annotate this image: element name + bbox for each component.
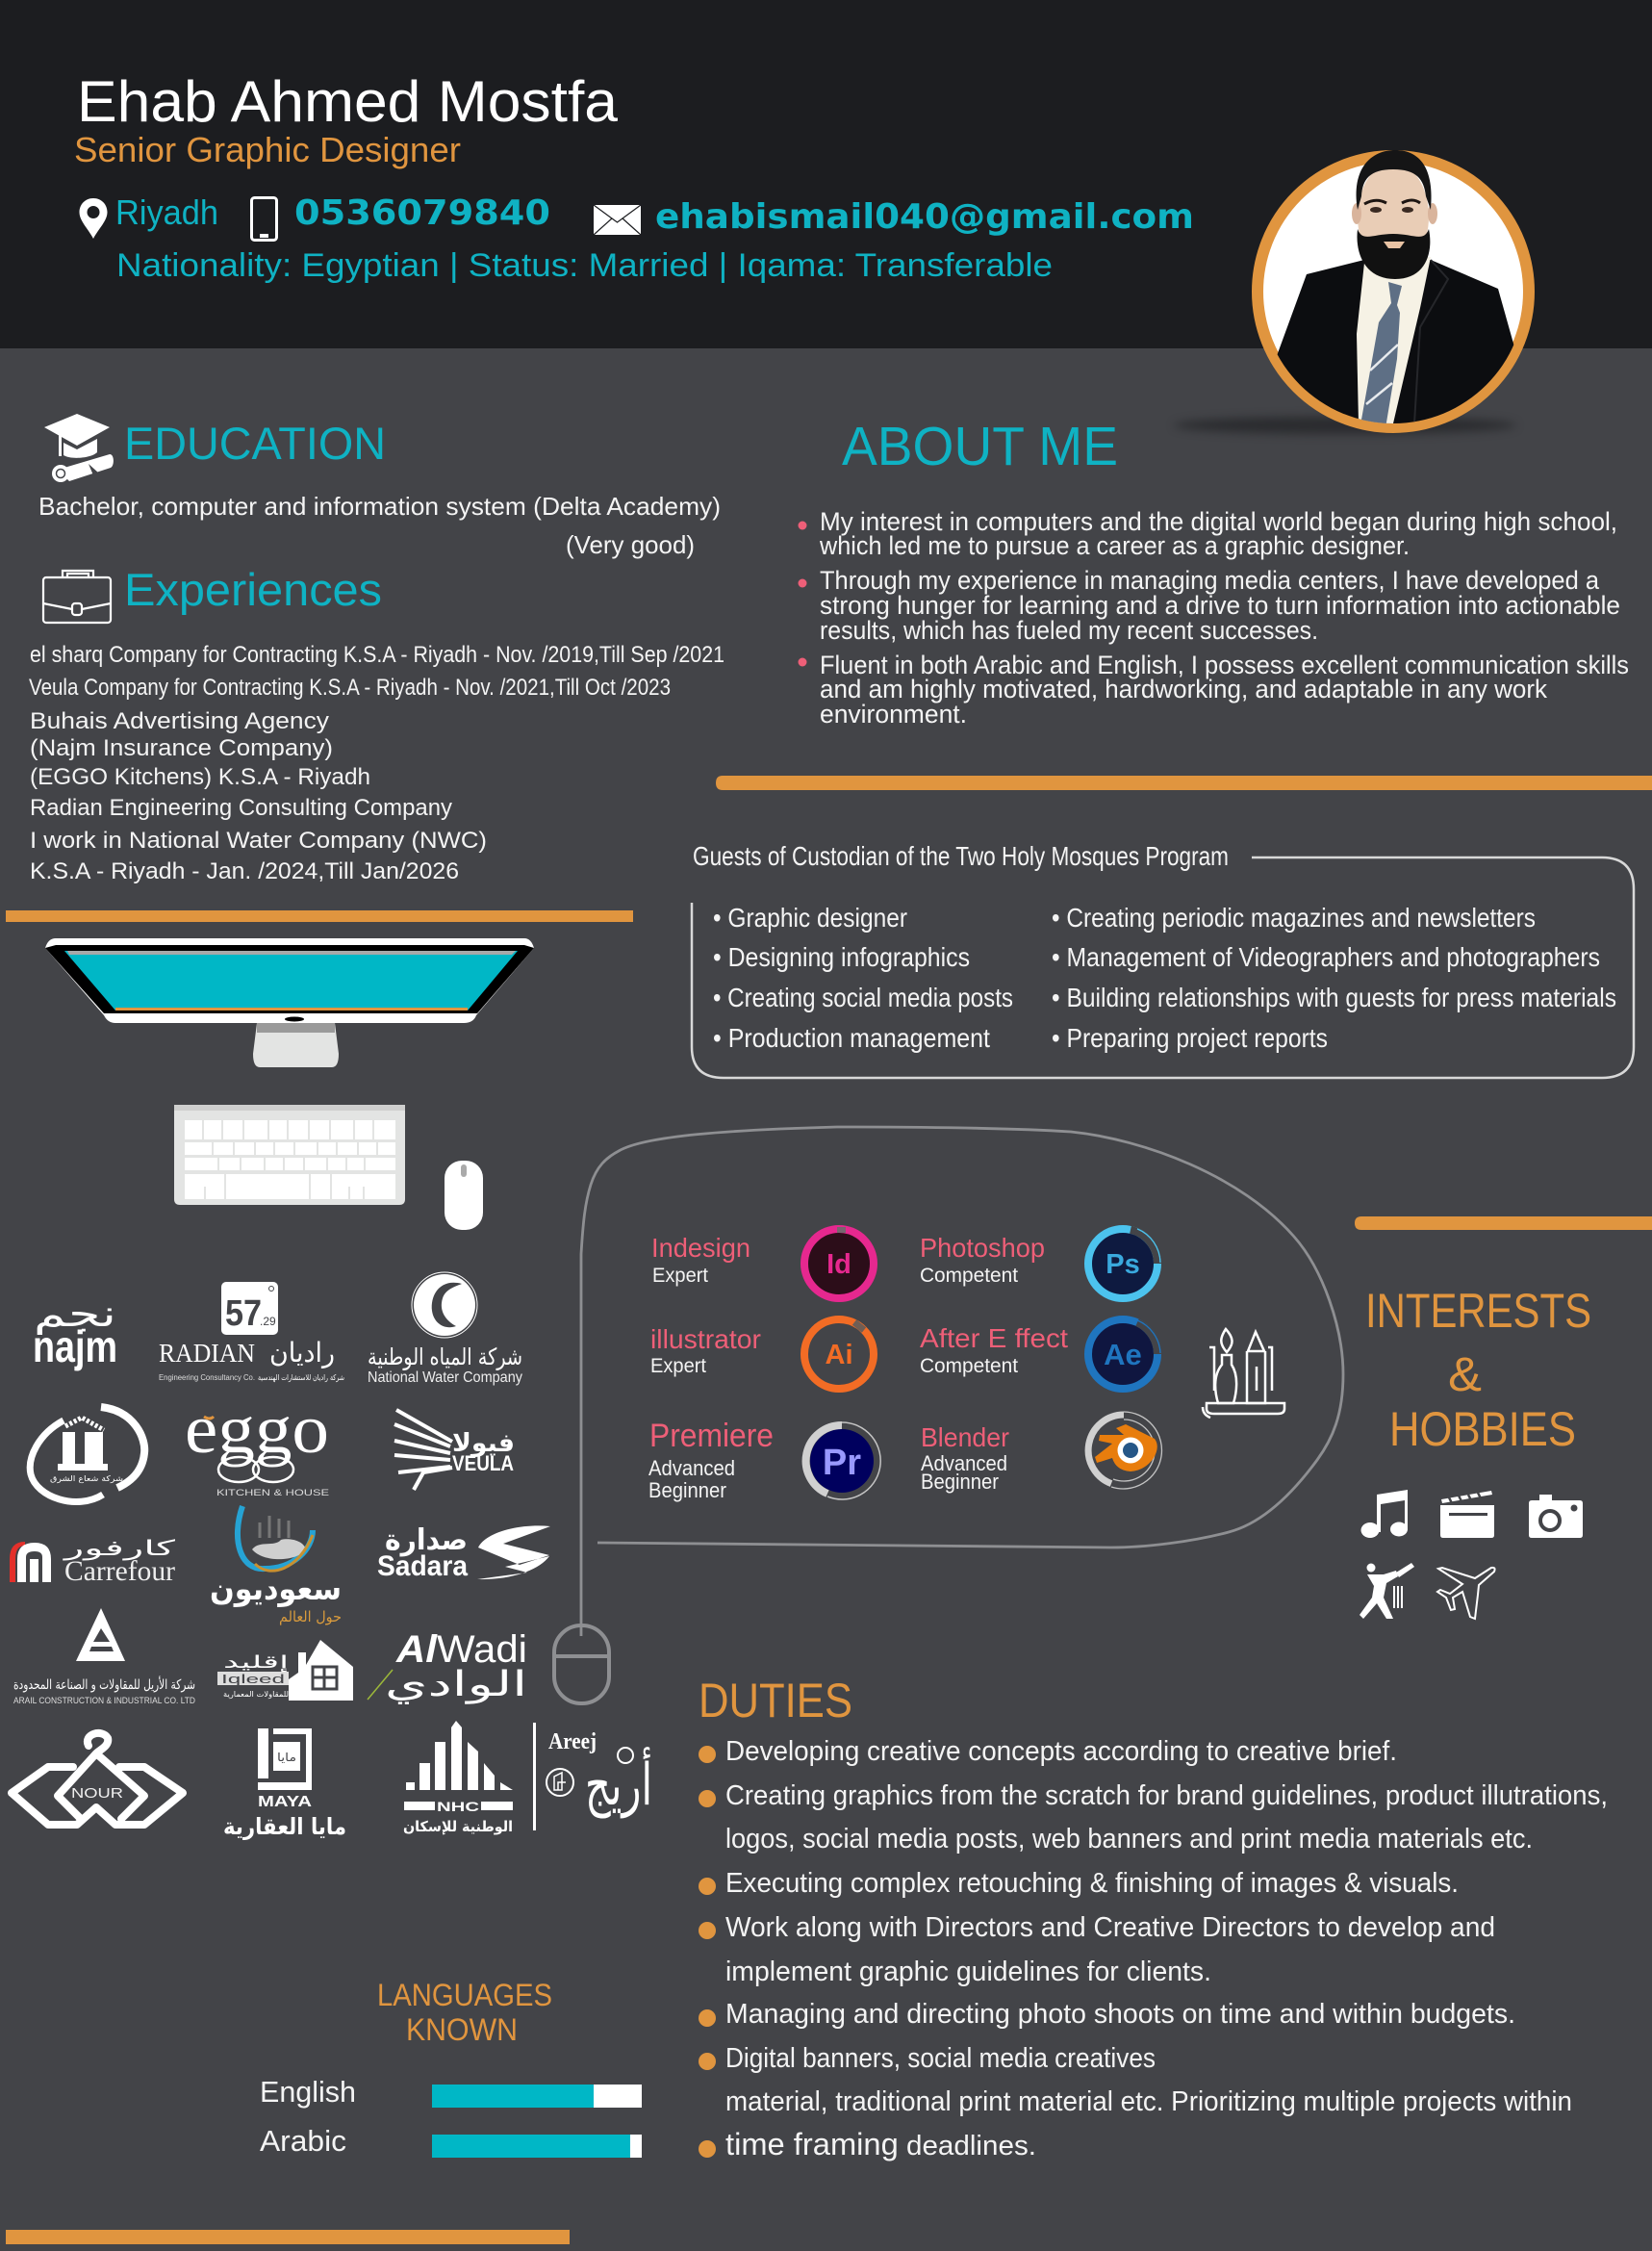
name: Ehab Ahmed Mostfa — [77, 69, 619, 134]
experience list: I work in National Water Company (NWC) — [30, 828, 487, 854]
bullet points: environment. — [820, 700, 967, 729]
logo: Iqleed: إقليد — [223, 1652, 289, 1673]
logo: El Sharq circular — [30, 1407, 144, 1501]
icon: envelope — [594, 205, 641, 235]
skill: Photoshop: Ps — [1106, 1249, 1140, 1280]
logo: AlWadi: الوادي — [385, 1665, 527, 1704]
logo: Iqleed — [217, 1640, 353, 1701]
logo: najm — [33, 1292, 117, 1371]
logo: Arail — [13, 1608, 195, 1705]
logo divider and Areej — [533, 1723, 652, 1830]
divider bar right top — [716, 776, 1652, 790]
logo: NHC: الوطنية للإسكان — [403, 1818, 513, 1835]
logo: najm: نجم — [34, 1292, 116, 1335]
logo: Maya: مايا — [277, 1751, 296, 1764]
panel: interests and hobbies: & — [1448, 1347, 1482, 1401]
experience list — [29, 642, 724, 884]
program box outline — [692, 857, 1634, 1078]
skill: Blender: Beginner — [921, 1470, 999, 1494]
duties text: material, traditional print material etc. Prioritizing multiple projects within — [725, 2086, 1572, 2117]
email: ehabismail040@gmail.com — [655, 197, 1194, 237]
degree: Bachelor, computer and information system (Delta Academy) — [38, 492, 721, 521]
logo: Radian: شركة راديان للاستشارات الهندسية — [258, 1373, 344, 1382]
divider bar right middle — [1355, 1216, 1652, 1230]
panel: interests and hobbies: HOBBIES — [1389, 1402, 1576, 1456]
skill: After Effect: Competent — [920, 1355, 1018, 1377]
personal details: Nationality: Egyptian | Status: Married | Iqama: Transferable — [116, 247, 1053, 284]
skill: Photoshop: Competent — [920, 1265, 1018, 1287]
logo: Veula — [394, 1410, 515, 1490]
experience list: Radian Engineering Consulting Company — [30, 795, 452, 821]
heading: LANGUAGES — [377, 1978, 552, 2012]
logo divider and Areej: أريج — [585, 1747, 652, 1819]
logo: National Water Company — [368, 1272, 522, 1386]
duties text: Creating graphics from the scratch for brand guidelines, product illutrations, — [725, 1780, 1608, 1811]
bullets — [699, 1746, 716, 2158]
skill: After Effect: Ae — [1104, 1338, 1142, 1371]
skill: After Effect — [920, 1319, 1160, 1389]
panel: languages: KNOWN — [406, 2012, 518, 2047]
skill: Indesign: Id — [826, 1249, 851, 1280]
duties list left: • Production management — [713, 1023, 990, 1053]
logo divider and Areej: Areej — [548, 1729, 597, 1754]
skill: illustrator — [650, 1319, 874, 1389]
logo: National Water Company: National Water Company — [368, 1369, 522, 1386]
panel: about me — [799, 416, 1629, 729]
skill: Photoshop — [920, 1229, 1160, 1298]
duties list right: • Creating periodic magazines and newsletters — [1052, 903, 1536, 933]
bullet points: Through my experience in managing media centers, I have developed a — [820, 566, 1600, 595]
skill: Premiere: Premiere — [649, 1418, 774, 1454]
city: Riyadh — [115, 192, 218, 232]
panel: interests and hobbies — [1360, 1284, 1591, 1619]
monitor — [45, 938, 534, 1067]
hair — [1357, 150, 1432, 210]
logo: Radian: راديان — [269, 1337, 335, 1369]
duties list right: • Preparing project reports — [1052, 1023, 1328, 1053]
logo: eggo — [185, 1391, 329, 1497]
icon: briefcase — [43, 571, 111, 623]
icon: graduation cap — [44, 414, 114, 482]
logo: Saudion — [210, 1506, 342, 1625]
logo: El Sharq circular: شركة شعاع الشرق — [50, 1474, 123, 1483]
logo: Maya: مايا العقارية — [223, 1813, 346, 1840]
icon: design tools — [1203, 1329, 1284, 1418]
bullet points: and am highly motivated, hardworking, and adaptable in any work — [820, 675, 1547, 703]
logo: AlWadi — [368, 1628, 527, 1704]
logo: NHC: NHC — [437, 1799, 479, 1814]
skill: Blender — [921, 1412, 1161, 1494]
illustration: desktop computer — [45, 938, 534, 1230]
icon: location pin — [79, 198, 108, 239]
skill: Indesign — [651, 1227, 874, 1298]
eyes and brows — [1364, 200, 1420, 204]
skill: Indesign: Indesign — [651, 1233, 750, 1263]
panel: client logos — [10, 1272, 652, 1840]
logo: NHC — [403, 1721, 513, 1835]
panel: Guests of Custodian program — [692, 841, 1634, 1078]
duties list left — [713, 903, 1013, 1053]
logo: Arail: ARAIL CONSTRUCTION & INDUSTRIAL CO. LTD — [13, 1696, 195, 1705]
duties text — [725, 1736, 1608, 2161]
logo: Radian: Engineering Consultancy Co. — [159, 1373, 255, 1382]
duties text: Work along with Directors and Creative Directors to develop and — [725, 1912, 1495, 1943]
computer mouse — [445, 1161, 483, 1230]
logo: Carrefour — [10, 1537, 176, 1587]
heading: INTERESTS — [1365, 1284, 1591, 1338]
portrait photo — [1251, 150, 1539, 443]
panel: duties — [699, 1674, 1608, 2161]
duties list left: • Creating social media posts — [713, 983, 1013, 1012]
logo: Sadara: صدارة — [385, 1523, 468, 1557]
skill: Premiere: Advanced — [648, 1456, 735, 1480]
job title: Senior Graphic Designer — [74, 130, 461, 169]
logo: Radian: .29 — [260, 1315, 276, 1328]
logo: Nour: NOUR — [71, 1785, 123, 1802]
heading: EDUCATION — [124, 418, 386, 469]
skill: illustrator: Ai — [826, 1340, 852, 1370]
logo: Iqleed: Iqleed — [221, 1672, 285, 1686]
logo: Veula: فيولا — [452, 1429, 515, 1458]
panel: languages — [260, 1978, 642, 2158]
skill: Photoshop: Photoshop — [920, 1233, 1045, 1263]
skill: Premiere: Beginner — [648, 1478, 726, 1502]
panel: experiences — [29, 564, 724, 884]
skill: illustrator: illustrator — [650, 1324, 761, 1354]
duties text: Executing complex retouching & finishing of images & visuals. — [725, 1868, 1459, 1899]
icon: mouse outline — [554, 1625, 609, 1703]
logo: Sadara: Sadara — [377, 1550, 468, 1582]
logo: Arail: شركة الأريل للمقاولات و الصناعة المحدودة — [13, 1675, 195, 1693]
phone number: 0536079840 — [294, 193, 550, 233]
bar: English — [432, 2085, 642, 2108]
duties text: implement graphic guidelines for clients. — [725, 1957, 1211, 1987]
logo: Radian: 57 — [225, 1293, 262, 1334]
logo: Nour — [12, 1733, 183, 1825]
duties text: time framing deadlines. — [725, 2127, 1036, 2161]
duties text: Managing and directing photo shoots on time and within budgets. — [725, 1999, 1515, 2030]
logo: Saudion: حول العالم — [279, 1608, 342, 1625]
grade: (Very good) — [566, 530, 695, 559]
bar: Arabic — [432, 2135, 642, 2158]
panel: education — [38, 414, 721, 559]
divider bar bottom — [6, 2230, 570, 2244]
logo: National Water Company: شركة المياه الوطنية — [368, 1343, 522, 1370]
bullet points — [799, 507, 1629, 729]
duties list left: • Designing infographics — [713, 942, 970, 972]
beard — [1357, 229, 1430, 279]
experience list: el sharq Company for Contracting K.S.A - Riyadh - Nov. /2019,Till Sep /2021 — [30, 642, 724, 668]
photo shadow — [1174, 417, 1516, 434]
logo: najm: najm — [33, 1321, 117, 1371]
skill: Premiere: Pr — [823, 1443, 861, 1483]
skill: Blender: Blender — [921, 1422, 1009, 1452]
divider bar left — [6, 910, 633, 922]
logo: Radian — [159, 1282, 344, 1382]
logo: eggo: KITCHEN & HOUSE — [216, 1488, 329, 1497]
experience list: Veula Company for Contracting K.S.A - Riyadh - Nov. /2021,Till Oct /2023 — [29, 675, 671, 701]
icon: airplane — [1437, 1568, 1495, 1619]
bullet points: which led me to pursue a career as a graphic designer. — [819, 531, 1410, 560]
logo: Veula: VEULA — [452, 1451, 514, 1475]
experience list: Buhais Advertising Agency — [30, 708, 329, 734]
logo: Carrefour: Carrefour — [64, 1555, 175, 1587]
skill: illustrator: Expert — [650, 1355, 706, 1377]
logo: Saudion: سعوديون — [210, 1571, 342, 1607]
icon: camera — [1529, 1495, 1583, 1538]
experience list: (EGGO Kitchens) K.S.A - Riyadh — [30, 764, 370, 790]
experience list: K.S.A - Riyadh - Jan. /2024,Till Jan/2026 — [30, 858, 459, 884]
skill: Blender: Advanced — [921, 1451, 1007, 1475]
logo: Radian: RADIAN — [159, 1339, 255, 1368]
logo: Carrefour: كارفور — [63, 1537, 176, 1561]
heading: ABOUT ME — [842, 416, 1118, 477]
logo: Maya: MAYA — [258, 1794, 313, 1810]
bullet points: results, which has fueled my recent successes. — [820, 616, 1318, 645]
duties list left: • Graphic designer — [713, 903, 907, 933]
duties text: Digital banners, social media creatives — [725, 2043, 1156, 2074]
icon: clapperboard — [1440, 1491, 1494, 1538]
duties text: logos, social media posts, web banners and print media materials etc. — [725, 1824, 1533, 1855]
heading: Experiences — [124, 564, 382, 615]
logo: eggo: eggo — [185, 1391, 329, 1468]
skill: Premiere — [648, 1418, 880, 1502]
icon: music — [1360, 1490, 1408, 1538]
logo: Maya — [223, 1728, 346, 1840]
program title: Guests of Custodian of the Two Holy Mosques Program — [693, 841, 1229, 871]
header band — [0, 0, 1652, 348]
bullet points: My interest in computers and the digital world began during high school, — [820, 507, 1617, 536]
logo: Sadara — [377, 1523, 550, 1582]
keyboard — [174, 1105, 405, 1205]
skill: Indesign: Expert — [652, 1265, 708, 1287]
language labels: English — [260, 2075, 356, 2109]
logo: Iqleed: للمقاولات المعمارية — [223, 1690, 289, 1699]
duties text: Developing creative concepts according to creative brief. — [725, 1736, 1397, 1767]
logo: AlWadi: AlWadi — [395, 1628, 527, 1671]
experience list: (Najm Insurance Company) — [30, 735, 333, 761]
panel: software skills outline — [554, 1127, 1343, 1703]
icon: phone — [252, 198, 277, 241]
duties list right — [1052, 903, 1616, 1053]
panel: languages: Arabic — [260, 2124, 346, 2158]
skill: After Effect: After E ffect — [920, 1323, 1068, 1353]
icon: cricket player — [1360, 1563, 1414, 1619]
heading: DUTIES — [699, 1674, 852, 1727]
bullet points: strong hunger for learning and a drive to turn information into actionable — [820, 591, 1620, 620]
